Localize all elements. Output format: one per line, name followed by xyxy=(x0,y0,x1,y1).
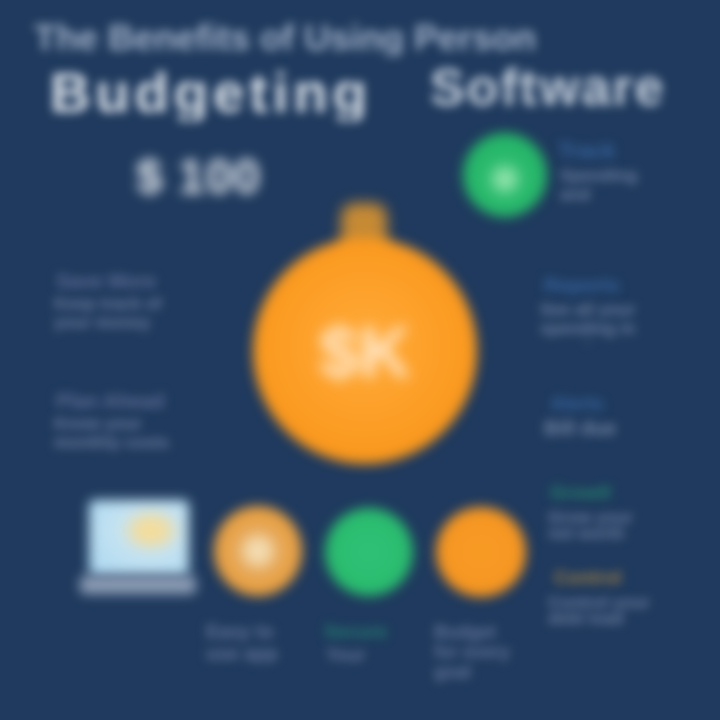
text: right benefit four xyxy=(546,566,651,628)
icon: laptop xyxy=(72,490,204,602)
text: right benefit three xyxy=(546,483,634,542)
text: bottom label two xyxy=(322,622,388,665)
bag body xyxy=(253,238,477,464)
icon: orange circle with light centre xyxy=(214,506,302,596)
icon: orange circle xyxy=(436,507,526,597)
icon: orange money bag xyxy=(243,192,487,474)
title xyxy=(30,18,668,128)
icon: green check badge xyxy=(463,133,547,217)
heading: Secure xyxy=(324,622,387,643)
heading: Reports xyxy=(544,275,620,297)
heading: Control xyxy=(554,568,622,589)
text: bottom label three: Budget for every goal xyxy=(434,622,510,682)
icon: green circle xyxy=(325,508,413,596)
text: left benefit one xyxy=(51,271,164,333)
text: top right benefit xyxy=(558,138,640,206)
laptop base xyxy=(80,576,196,594)
body: Keep track of your money xyxy=(54,294,162,332)
text: bottom label one: Easy to use app xyxy=(206,622,278,665)
heading: Save More xyxy=(56,271,156,293)
heading: Plan Ahead xyxy=(56,391,164,413)
text: right benefit one xyxy=(538,274,637,344)
heading: Alerts xyxy=(550,394,604,415)
laptop screen xyxy=(89,500,189,576)
text: right benefit two xyxy=(540,394,618,440)
body: Know your monthly costs xyxy=(54,414,169,452)
bag neck xyxy=(341,203,387,263)
text: left benefit two xyxy=(51,390,171,453)
